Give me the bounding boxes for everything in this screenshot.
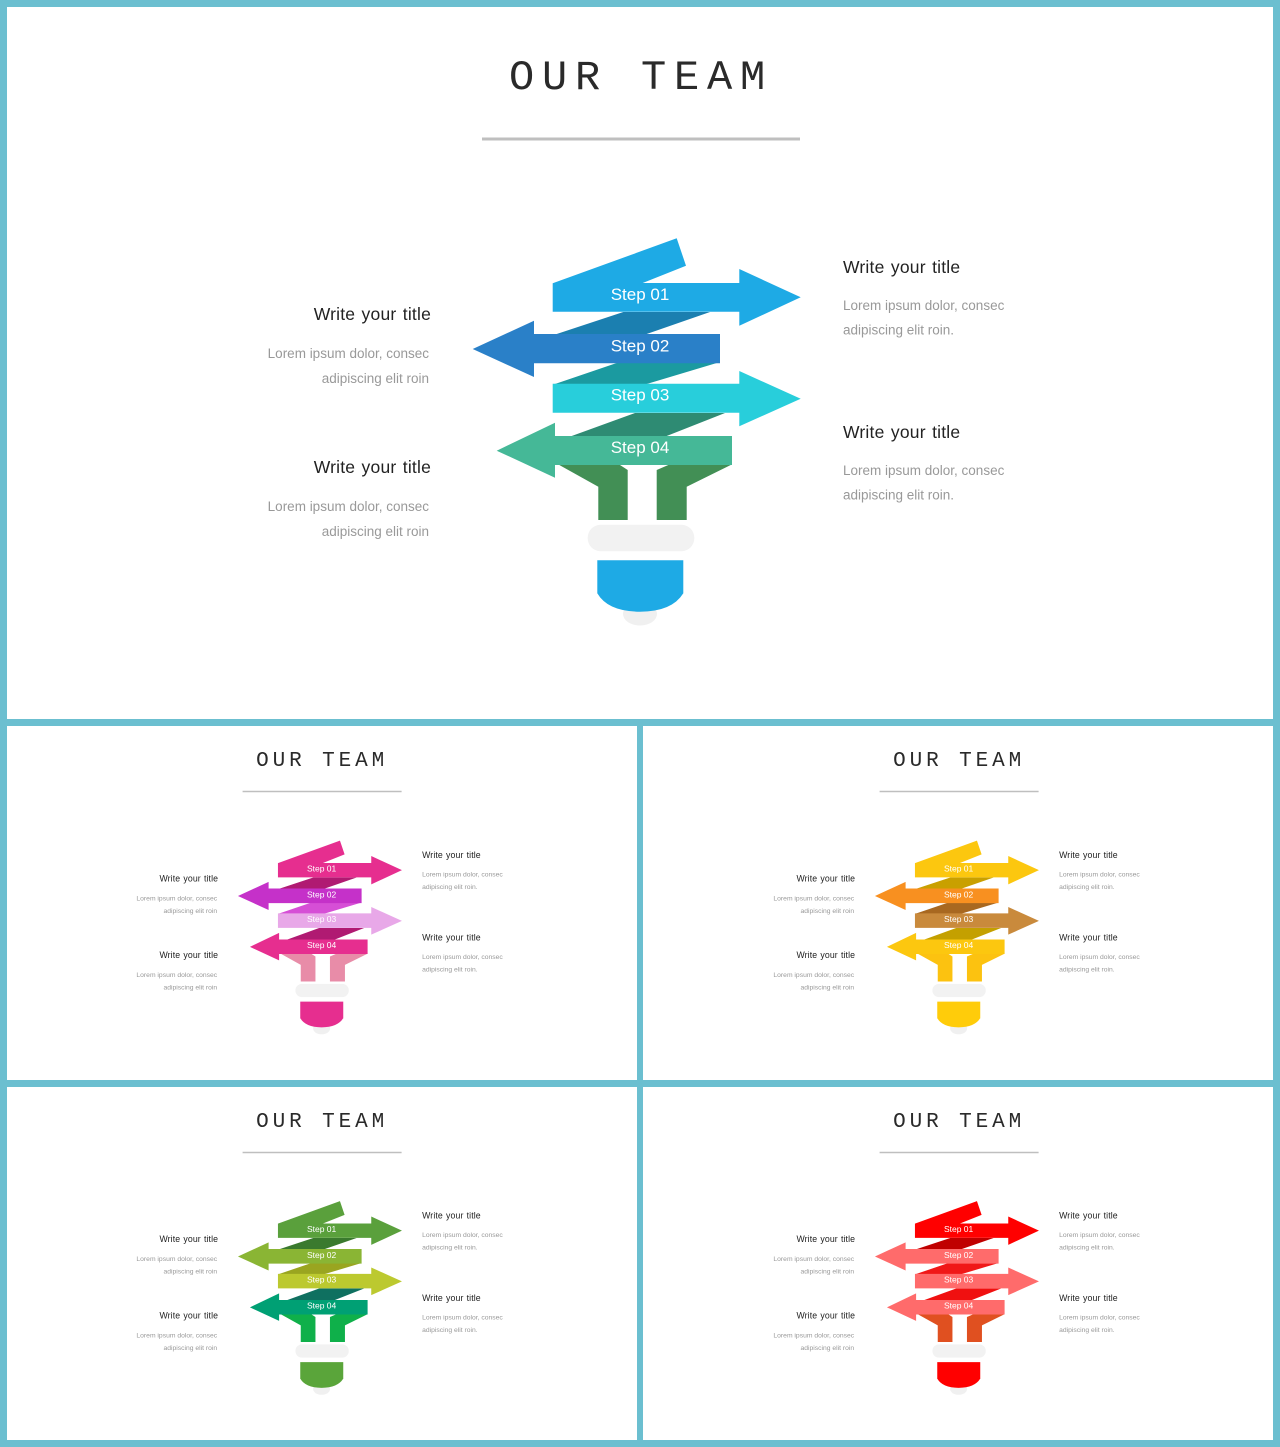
text block: lower left: Lorem ipsum dolor, consec <box>268 499 429 514</box>
text block: upper left: Lorem ipsum dolor, consec <box>268 346 429 361</box>
text block: lower left: adipiscing elit roin <box>800 984 854 992</box>
text block: top right: adipiscing elit roin. <box>843 322 954 338</box>
text block: upper left: adipiscing elit roin <box>800 908 854 915</box>
bulb diagram: blue: Step 02 <box>611 336 669 356</box>
title: OUR TEAM <box>256 750 388 773</box>
text block: upper left: Write your title <box>796 1234 855 1244</box>
text block: upper left: adipiscing elit roin <box>800 1268 854 1276</box>
title: OUR TEAM <box>893 750 1025 773</box>
panel: yellow slide <box>643 726 1273 1080</box>
bulb diagram: green: Step 01 <box>307 1224 337 1234</box>
text block: lower right: adipiscing elit roin. <box>1059 1327 1115 1334</box>
title: OUR TEAM <box>509 54 773 102</box>
text block: top right: adipiscing elit roin. <box>1059 884 1115 891</box>
text block: lower right: adipiscing elit roin. <box>422 1327 478 1334</box>
text block: lower left: adipiscing elit roin <box>163 1345 217 1352</box>
text block: lower left: Write your title <box>159 1310 218 1320</box>
text block: lower right: adipiscing elit roin. <box>1059 966 1115 973</box>
text block: upper left <box>136 1234 218 1276</box>
text block: lower left <box>136 1310 218 1352</box>
text block: lower left: Lorem ipsum dolor, consec <box>773 972 855 979</box>
text block: upper left: Write your title <box>159 1234 218 1244</box>
bulb diagram: yellow: Step 01 <box>944 864 974 874</box>
bulb diagram: yellow: Step 02 <box>944 889 974 899</box>
text block: top right: Lorem ipsum dolor, consec <box>1059 872 1140 878</box>
text block: top right: Lorem ipsum dolor, consec <box>422 872 503 878</box>
text block: top right: Lorem ipsum dolor, consec <box>422 1232 503 1239</box>
text block: upper left <box>773 874 855 915</box>
text block: top right: adipiscing elit roin. <box>422 1244 478 1251</box>
bulb diagram: blue: Step 01 <box>611 285 669 304</box>
text block: lower right <box>422 932 503 973</box>
text block: top right: Write your title <box>843 257 960 277</box>
bulb diagram: blue: Step 03 <box>611 386 669 404</box>
text block: lower right: adipiscing elit roin. <box>422 966 478 973</box>
text block: lower right: Lorem ipsum dolor, consec <box>1059 1314 1140 1322</box>
text block: lower right <box>1059 932 1140 973</box>
text block: lower right: Write your title <box>843 422 960 442</box>
text block: lower right <box>422 1293 503 1334</box>
text block: upper left <box>136 874 218 915</box>
text block: upper left: adipiscing elit roin <box>163 1268 217 1276</box>
panel: pink slide <box>7 726 637 1080</box>
bulb diagram: red: Step 04 <box>944 1300 974 1310</box>
bulb diagram: yellow: Step 03 <box>944 914 974 924</box>
text block: lower left: adipiscing elit roin <box>322 524 429 539</box>
bulb diagram: blue <box>473 238 801 626</box>
text block: upper left: Lorem ipsum dolor, consec <box>773 896 855 902</box>
text block: top right: Lorem ipsum dolor, consec <box>843 298 1005 313</box>
text block: top right <box>422 1210 503 1251</box>
text block: top right: Write your title <box>422 1210 481 1220</box>
bulb diagram: green: Step 03 <box>307 1274 337 1284</box>
bulb diagram: red: Step 02 <box>944 1250 974 1260</box>
text block: top right: Write your title <box>422 850 481 860</box>
bulb diagram: pink: Step 02 <box>307 889 337 899</box>
text block: top right <box>1059 1210 1140 1251</box>
text block: lower left <box>136 950 218 992</box>
text block: upper left: Lorem ipsum dolor, consec <box>136 1256 218 1263</box>
bulb diagram: red <box>875 1201 1039 1395</box>
text block: top right: adipiscing elit roin. <box>1059 1244 1115 1251</box>
text block: lower right: Write your title <box>1059 932 1118 942</box>
text block: upper left: Lorem ipsum dolor, consec <box>136 896 218 902</box>
text block: upper left <box>268 304 431 386</box>
text block: upper left: Write your title <box>314 304 431 324</box>
text block: upper left: Lorem ipsum dolor, consec <box>773 1256 855 1263</box>
text block: upper left: Write your title <box>159 874 218 884</box>
text block: top right: Lorem ipsum dolor, consec <box>1059 1232 1140 1239</box>
bulb diagram: green: Step 02 <box>307 1250 337 1260</box>
text block: lower left: Write your title <box>314 457 431 477</box>
bulb diagram: red: Step 03 <box>944 1274 974 1284</box>
text block: top right: Write your title <box>1059 850 1118 860</box>
text block: upper left <box>773 1234 855 1276</box>
panel: red slide <box>643 1087 1273 1440</box>
text block: lower right: Write your title <box>422 932 481 942</box>
title: OUR TEAM <box>256 1111 388 1134</box>
text block: lower left: Write your title <box>159 950 218 960</box>
text block: top right <box>1059 850 1140 891</box>
text block: lower right: Lorem ipsum dolor, consec <box>422 1314 503 1322</box>
text block: lower right: Lorem ipsum dolor, consec <box>1059 954 1140 961</box>
bulb diagram: yellow <box>875 841 1039 1034</box>
bulb diagram: red: Step 01 <box>944 1224 974 1234</box>
text block: lower left <box>268 457 431 539</box>
panel: main blue slide <box>7 7 1273 719</box>
bulb diagram: pink: Step 03 <box>307 914 337 924</box>
text block: lower right <box>1059 1293 1140 1334</box>
panel: green slide <box>7 1087 637 1440</box>
title: OUR TEAM <box>893 1111 1025 1134</box>
text block: lower right: Write your title <box>1059 1293 1118 1303</box>
text block: lower right: Lorem ipsum dolor, consec <box>422 954 503 961</box>
text block: lower left: Lorem ipsum dolor, consec <box>136 972 218 979</box>
text block: top right: adipiscing elit roin. <box>422 884 478 891</box>
text block: upper left: adipiscing elit roin <box>163 908 217 915</box>
text block: lower left: Lorem ipsum dolor, consec <box>136 1332 218 1340</box>
text block: lower left: Write your title <box>796 1310 855 1320</box>
bulb diagram: pink <box>238 841 402 1034</box>
text block: top right: Write your title <box>1059 1210 1118 1220</box>
text block: lower left: Lorem ipsum dolor, consec <box>773 1332 855 1340</box>
text block: lower left: adipiscing elit roin <box>800 1345 854 1352</box>
bulb diagram: pink: Step 04 <box>307 940 337 950</box>
bulb diagram: green: Step 04 <box>307 1300 337 1310</box>
text block: lower left: adipiscing elit roin <box>163 984 217 992</box>
text block: lower left <box>773 1310 855 1352</box>
bulb diagram: blue: Step 04 <box>611 438 669 457</box>
text block: top right <box>843 257 1005 338</box>
text block: lower right: Write your title <box>422 1293 481 1303</box>
bulb diagram: pink: Step 01 <box>307 864 337 874</box>
text block: lower right <box>843 422 1005 502</box>
text block: lower left <box>773 950 855 992</box>
text block: lower left: Write your title <box>796 950 855 960</box>
bulb diagram: yellow: Step 04 <box>944 940 974 950</box>
text block: upper left: adipiscing elit roin <box>322 371 429 386</box>
text block: lower right: Lorem ipsum dolor, consec <box>843 463 1005 478</box>
text block: top right <box>422 850 503 891</box>
bulb diagram: green <box>238 1201 402 1395</box>
text block: lower right: adipiscing elit roin. <box>843 488 954 502</box>
text block: upper left: Write your title <box>796 874 855 884</box>
